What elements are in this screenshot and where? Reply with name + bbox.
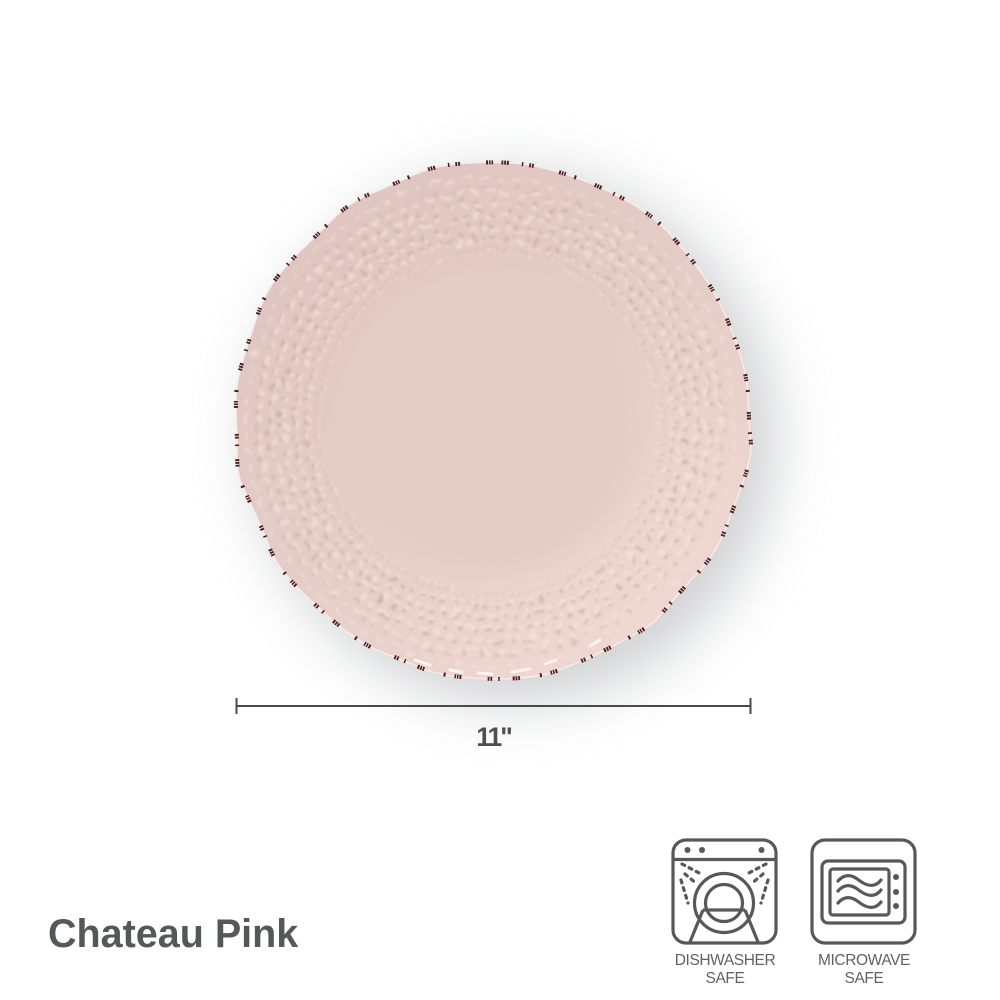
bottom rim highlights [415, 640, 600, 674]
icon: dishwasher safe [673, 840, 776, 943]
plate [236, 162, 751, 679]
dishwasher label [675, 952, 775, 987]
microwave label [818, 952, 910, 987]
dishwasher label: DISHWASHER [675, 952, 775, 969]
plate drop shadow [254, 174, 774, 702]
product name: Chateau Pink [48, 912, 298, 956]
dimension label: 11" [476, 722, 511, 752]
microwave label: MICROWAVE [818, 952, 910, 969]
dimension line: plate diameter [236, 698, 751, 714]
microwave label: SAFE [845, 970, 883, 987]
distressed brown rim [236, 162, 751, 679]
plate centre well [340, 272, 640, 572]
icon: microwave safe [812, 840, 915, 943]
embossed lace rim texture [246, 178, 734, 666]
dishwasher label: SAFE [706, 970, 744, 987]
